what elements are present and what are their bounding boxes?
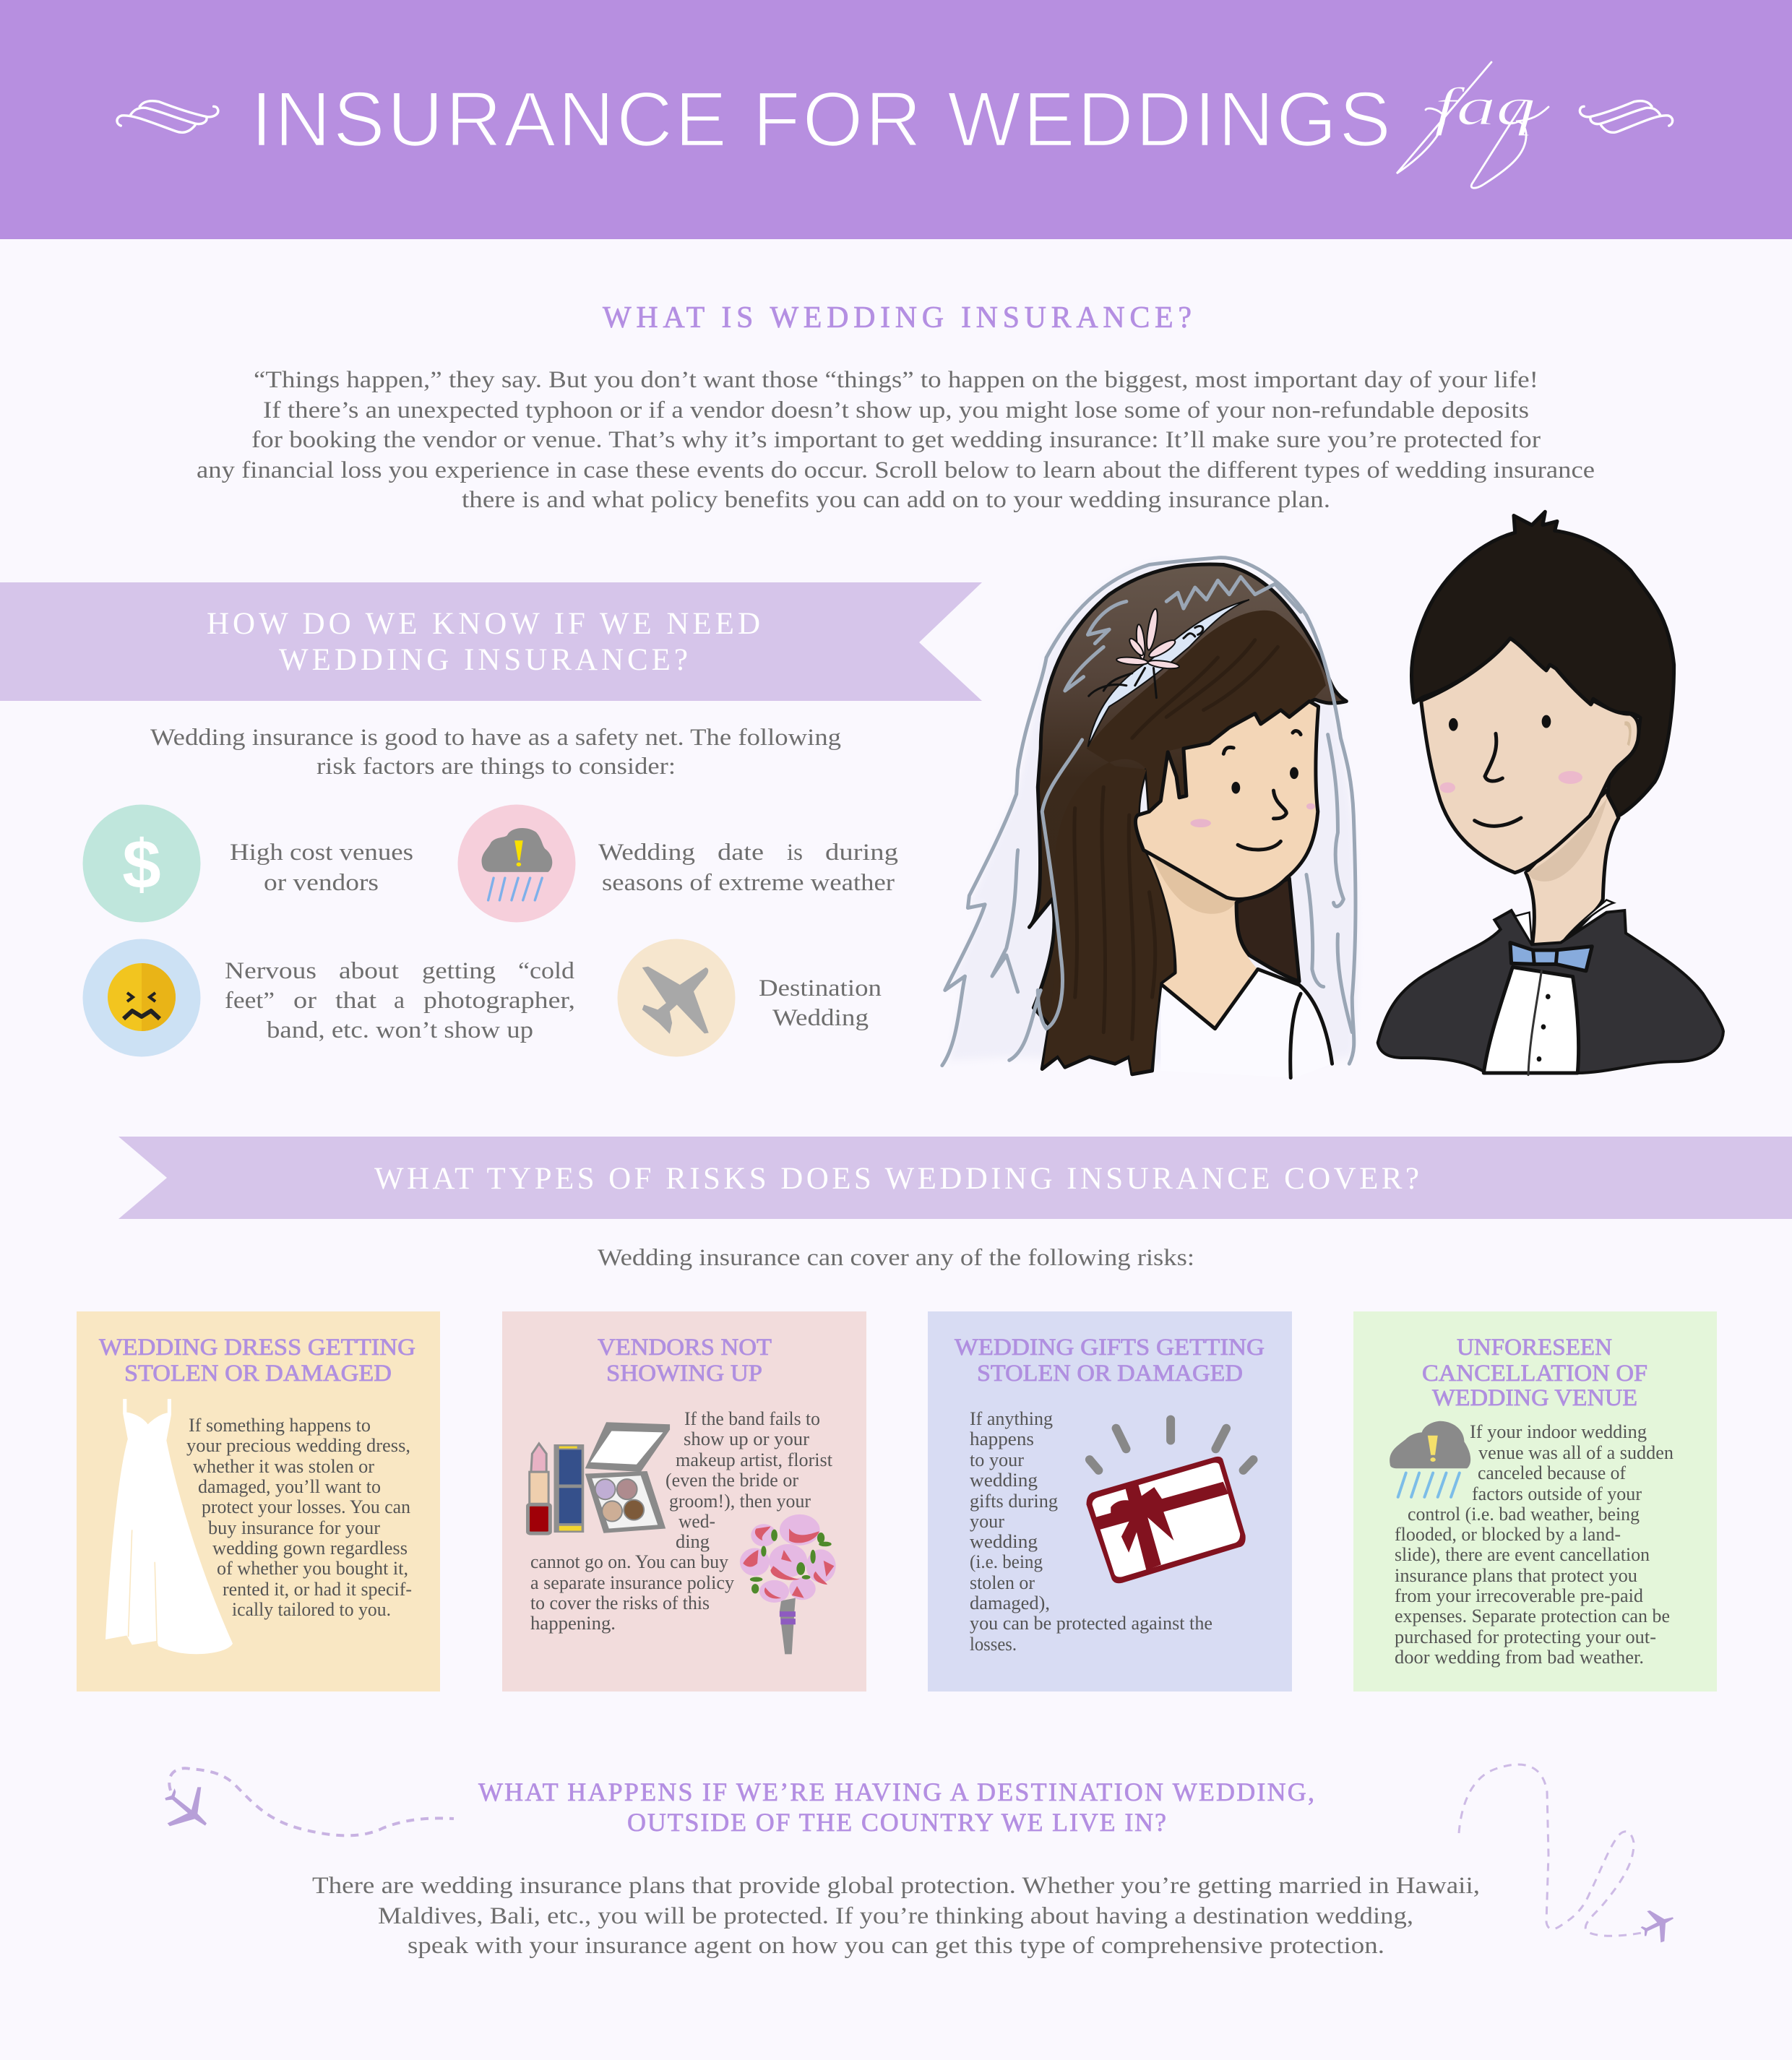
card text: groom!), then your bbox=[669, 1491, 811, 1512]
icon: left airplane bbox=[165, 1787, 207, 1826]
risk factor: destination wedding bbox=[617, 939, 882, 1056]
groom ear detail bbox=[1624, 721, 1632, 746]
text: high cost: High cost venues bbox=[230, 840, 413, 866]
heading: what is wedding insurance: WHAT IS WEDDING INSURANCE? bbox=[603, 301, 1192, 335]
icon: storm cloud bbox=[1390, 1421, 1470, 1497]
icon: dollar: $ bbox=[122, 826, 161, 903]
text: cold feet: a bbox=[394, 988, 405, 1014]
card text: canceled because of bbox=[1478, 1462, 1626, 1483]
card text: ding bbox=[676, 1531, 710, 1552]
banner: how do we know bbox=[0, 582, 982, 701]
card title bbox=[598, 1335, 772, 1387]
bride neck bbox=[1144, 850, 1258, 1029]
card text: whether it was stolen or bbox=[193, 1456, 374, 1477]
left plane with dashed flight path bbox=[165, 1768, 454, 1835]
card title: STOLEN OR DAMAGED bbox=[977, 1361, 1243, 1387]
text: destination: Destination bbox=[759, 975, 882, 1001]
card text bbox=[530, 1408, 833, 1634]
groom shirt placket bbox=[1528, 971, 1551, 1075]
text: extreme weather: Wedding bbox=[598, 840, 695, 866]
card text: insurance plans that protect you bbox=[1395, 1565, 1637, 1586]
panel: vendors not showing up bbox=[502, 1311, 866, 1691]
text: cold feet: getting bbox=[422, 958, 496, 984]
destination text block: speak with your insurance agent on how you can get this type of comprehensive protection. bbox=[408, 1933, 1384, 1959]
card text: of whether you bought it, bbox=[217, 1558, 408, 1579]
card text: control (i.e. bad weather, being bbox=[1408, 1504, 1640, 1525]
card text: If the band fails to bbox=[684, 1408, 820, 1429]
icon: left flourish bbox=[117, 101, 218, 132]
icon: white dress bbox=[105, 1399, 233, 1654]
intro text block: any financial loss you experience in case these events do occur. Scroll below to learn about the different types of wedding insurance bbox=[197, 457, 1595, 483]
card text: losses. bbox=[970, 1634, 1017, 1655]
card text bbox=[186, 1415, 412, 1620]
card text: (i.e. being bbox=[970, 1551, 1043, 1572]
intro text block: there is and what policy benefits you can add on to your wedding insurance plan. bbox=[462, 487, 1330, 513]
card title: CANCELLATION OF bbox=[1422, 1361, 1647, 1387]
text: extreme weather: seasons of extreme weather bbox=[602, 870, 895, 896]
card title bbox=[99, 1335, 415, 1387]
bride bangs bbox=[1043, 611, 1326, 1072]
risk factor: high cost venues bbox=[82, 805, 413, 922]
text: destination bbox=[759, 975, 882, 1031]
bride hair back bbox=[1236, 878, 1299, 981]
title script: faq: faq bbox=[1434, 77, 1535, 137]
text: extreme weather: is bbox=[787, 840, 803, 866]
text: cold feet: feet” bbox=[225, 988, 275, 1014]
text: extreme weather: date bbox=[718, 840, 764, 866]
destination text block bbox=[312, 1873, 1480, 1959]
bride hair strands bbox=[1074, 640, 1278, 1039]
card text: wedding gown regardless bbox=[212, 1538, 408, 1559]
text: destination: Wedding bbox=[772, 1005, 869, 1031]
heading: destination wedding bbox=[478, 1777, 1314, 1837]
text: cold feet: photographer, bbox=[423, 988, 575, 1014]
groom collar bbox=[1515, 900, 1614, 944]
card text: rented it, or had it specif- bbox=[223, 1579, 412, 1600]
groom face bbox=[1421, 639, 1639, 873]
right plane with dashed flight path bbox=[1459, 1764, 1673, 1942]
card title bbox=[1422, 1335, 1647, 1411]
card text: door wedding from bad weather. bbox=[1395, 1647, 1644, 1668]
icon: nervous face bbox=[82, 939, 201, 1056]
text: cold feet: Nervous bbox=[225, 958, 316, 984]
destination text block: There are wedding insurance plans that provide global protection. Whether you’re getting married in Hawaii, bbox=[312, 1873, 1480, 1899]
card text: gifts during bbox=[970, 1491, 1058, 1512]
card text: makeup artist, florist bbox=[676, 1449, 833, 1470]
bride veil lines bbox=[942, 558, 1356, 1066]
groom neck bbox=[1526, 790, 1619, 948]
icon: storm cloud bbox=[458, 805, 575, 922]
card title: SHOWING UP bbox=[606, 1361, 762, 1387]
title script: faq bbox=[1397, 62, 1548, 188]
icon: right airplane bbox=[1641, 1910, 1673, 1942]
intro text block: If there’s an unexpected typhoon or if a vendor doesn’t show up, you might lose some of your non-refundable deposits bbox=[263, 397, 1529, 423]
panel: wedding gifts bbox=[928, 1311, 1292, 1691]
header band bbox=[0, 0, 1792, 239]
intro text block bbox=[197, 367, 1595, 513]
card title bbox=[955, 1335, 1265, 1387]
bride face bbox=[1135, 702, 1319, 899]
card text: If your indoor wedding bbox=[1470, 1421, 1647, 1442]
illustration: bride bbox=[942, 558, 1358, 1078]
panel: venue cancellation bbox=[1353, 1311, 1717, 1691]
card title: STOLEN OR DAMAGED bbox=[124, 1361, 392, 1387]
card text: happens bbox=[970, 1428, 1034, 1449]
icon: gift bbox=[1086, 1420, 1254, 1583]
bride headband bbox=[1087, 600, 1249, 747]
card text: damaged, you’ll want to bbox=[198, 1476, 381, 1497]
illustration: groom bbox=[1378, 512, 1723, 1075]
intro text block: for booking the vendor or venue. That’s why it’s important to get wedding insurance: It’ll make sure you’re protected for bbox=[251, 427, 1541, 453]
card text: to cover the risks of this bbox=[530, 1593, 710, 1613]
risk factors intro text bbox=[150, 725, 841, 780]
icon: bouquet bbox=[740, 1514, 836, 1654]
card text: protect your losses. You can bbox=[202, 1496, 410, 1517]
groom neck shadow bbox=[1527, 797, 1608, 882]
card text bbox=[1395, 1421, 1673, 1668]
card text: a separate insurance policy bbox=[530, 1572, 734, 1593]
card text: expenses. Separate protection can be bbox=[1395, 1606, 1670, 1626]
bride veil fabric bbox=[949, 561, 1358, 1067]
card text: wedding bbox=[970, 1470, 1038, 1491]
text: high cost: or vendors bbox=[264, 870, 379, 896]
card text: ically tailored to you. bbox=[232, 1599, 391, 1620]
groom jacket bbox=[1378, 910, 1723, 1073]
card text: venue was all of a sudden bbox=[1478, 1442, 1673, 1463]
banner: how do we know: HOW DO WE KNOW IF WE NEED bbox=[207, 607, 760, 641]
risks intro text: Wedding insurance can cover any of the following risks: bbox=[598, 1245, 1194, 1271]
destination text block: Maldives, Bali, etc., you will be protected. If you’re thinking about having a destination wedding, bbox=[378, 1903, 1413, 1929]
heading: destination wedding: WHAT HAPPENS IF WE’RE HAVING A DESTINATION WEDDING, bbox=[478, 1777, 1314, 1806]
card text: happening. bbox=[530, 1613, 616, 1634]
text: cold feet: “cold bbox=[518, 958, 575, 984]
card text: cannot go on. You can buy bbox=[530, 1551, 728, 1572]
risk factors intro text: risk factors are things to consider: bbox=[316, 754, 676, 780]
card text: show up or your bbox=[684, 1428, 809, 1449]
text: cold feet: about bbox=[339, 958, 399, 984]
text: cold feet: or bbox=[293, 988, 316, 1014]
groom eyes bbox=[1449, 715, 1551, 731]
bride blush bbox=[1190, 803, 1315, 827]
groom hair bbox=[1411, 512, 1674, 816]
groom shirt bbox=[1483, 967, 1579, 1073]
card text: from your irrecoverable pre-paid bbox=[1395, 1585, 1643, 1606]
card text bbox=[970, 1408, 1212, 1655]
icon: dollar bbox=[82, 805, 201, 922]
risk factor: extreme weather bbox=[458, 805, 898, 922]
card text: If something happens to bbox=[189, 1415, 371, 1436]
text: extreme weather bbox=[598, 840, 898, 896]
intro text block: “Things happen,” they say. But you don’t want those “things” to happen on the biggest, most important day of your life! bbox=[254, 367, 1538, 393]
panel: wedding dress bbox=[77, 1311, 440, 1691]
bride dress bbox=[1160, 969, 1332, 1078]
card text: your precious wedding dress, bbox=[186, 1435, 410, 1456]
card text: slide), there are event cancellation bbox=[1395, 1544, 1650, 1565]
card text: damaged), bbox=[970, 1593, 1050, 1613]
banner: what types of risks: WHAT TYPES OF RISKS DOES WEDDING INSURANCE COVER? bbox=[374, 1162, 1419, 1196]
icon: right flourish bbox=[1580, 101, 1673, 132]
card text: wedding bbox=[970, 1531, 1038, 1552]
card text: factors outside of your bbox=[1472, 1483, 1642, 1504]
title: INSURANCE FOR WEDDINGS bbox=[251, 75, 1391, 163]
card text: (even the bride or bbox=[665, 1470, 798, 1491]
bride neck shadow bbox=[1152, 857, 1236, 914]
groom facial features bbox=[1475, 733, 1521, 826]
groom blush bbox=[1440, 771, 1582, 793]
card text: If anything bbox=[970, 1408, 1053, 1429]
text: cold feet: band, etc. won’t show up bbox=[267, 1017, 533, 1043]
text: cold feet bbox=[225, 958, 575, 1043]
text: high cost bbox=[230, 840, 413, 896]
card text: to your bbox=[970, 1449, 1024, 1470]
text: extreme weather: during bbox=[825, 840, 898, 866]
banner: what types of risks bbox=[119, 1137, 1792, 1219]
card text: stolen or bbox=[970, 1572, 1035, 1593]
icon: makeup bbox=[528, 1422, 670, 1533]
card text: wed- bbox=[679, 1511, 715, 1532]
card title: WEDDING GIFTS GETTING bbox=[955, 1335, 1265, 1361]
card text: you can be protected against the bbox=[970, 1613, 1212, 1634]
groom bow tie bbox=[1510, 943, 1592, 971]
bride facial features bbox=[1223, 731, 1301, 850]
bride shoulder lines bbox=[1160, 902, 1332, 1078]
card text: buy insurance for your bbox=[208, 1517, 380, 1538]
bride eyes bbox=[1231, 767, 1298, 793]
risk factors intro text: Wedding insurance is good to have as a safety net. The following bbox=[150, 725, 841, 751]
card text: purchased for protecting your out- bbox=[1395, 1626, 1656, 1647]
card text: your bbox=[970, 1511, 1004, 1532]
bride hair bbox=[1029, 564, 1346, 1074]
banner: how do we know: WEDDING INSURANCE? bbox=[279, 643, 688, 677]
heading: destination wedding: OUTSIDE OF THE COUNTRY WE LIVE IN? bbox=[627, 1808, 1166, 1837]
risk factor: cold feet bbox=[82, 939, 575, 1056]
icon: airplane bbox=[617, 939, 736, 1056]
card title: VENDORS NOT bbox=[598, 1335, 772, 1361]
card title: WEDDING DRESS GETTING bbox=[99, 1335, 415, 1361]
text: cold feet: that bbox=[335, 988, 376, 1014]
card title: UNFORESEEN bbox=[1457, 1335, 1612, 1361]
card text: flooded, or blocked by a land- bbox=[1395, 1524, 1621, 1545]
card title: WEDDING VENUE bbox=[1432, 1385, 1637, 1411]
